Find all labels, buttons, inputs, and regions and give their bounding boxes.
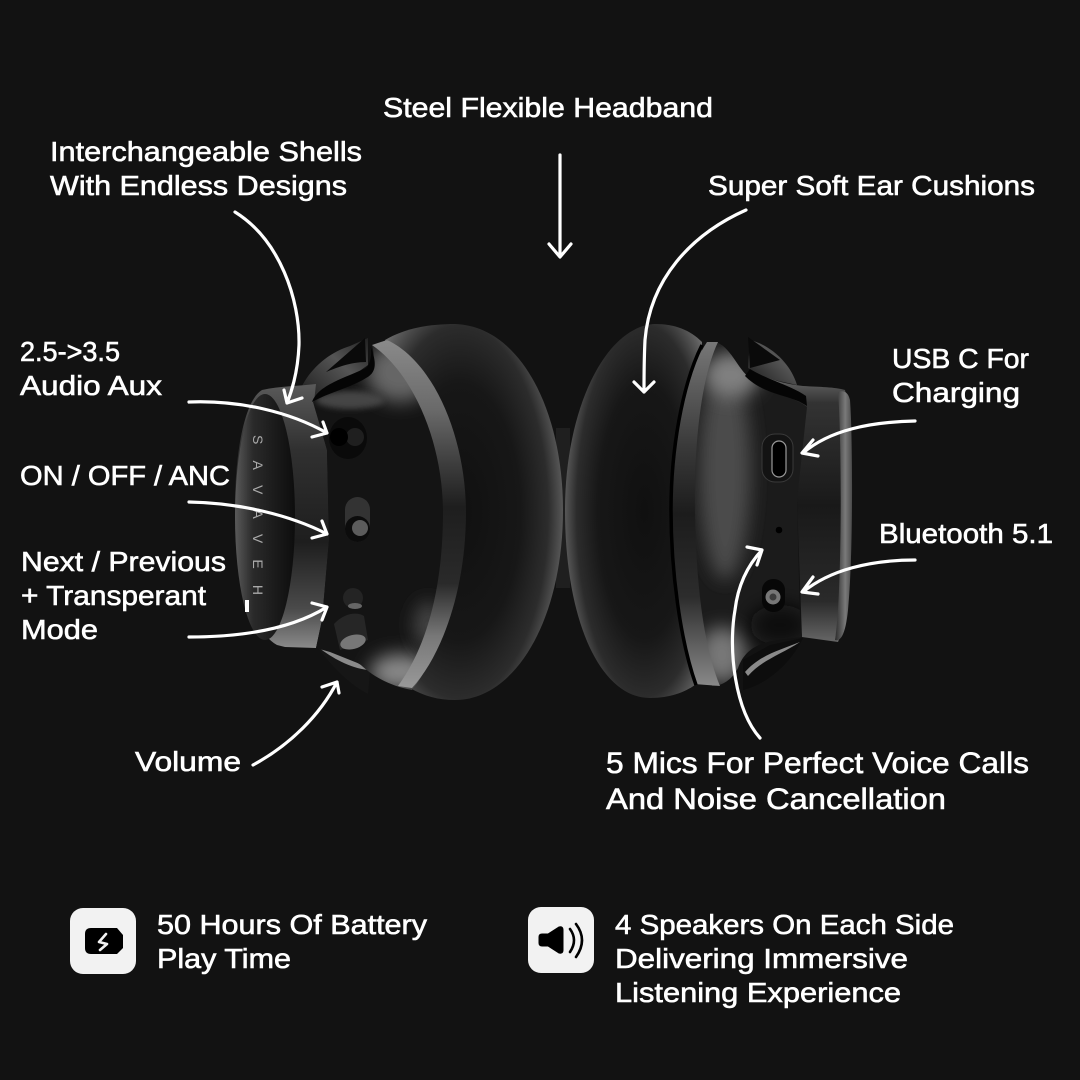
arrow: mics — [732, 547, 762, 738]
label: next previous — [21, 546, 327, 645]
left body — [313, 340, 434, 690]
arrow: bluetooth — [802, 560, 915, 594]
right shell — [750, 370, 852, 642]
audio jack — [329, 417, 367, 459]
left hinge blade top — [326, 338, 366, 372]
label: bluetooth — [802, 518, 1053, 594]
label: next previous: Next / Previous — [21, 546, 226, 577]
feature: battery — [70, 908, 427, 974]
arrow: switch — [189, 502, 327, 538]
right shell rim — [835, 391, 852, 640]
label: steel headband: Steel Flexible Headband — [383, 92, 713, 123]
label: ear cushions: Super Soft Ear Cushions — [708, 170, 1035, 201]
label: on off anc — [20, 460, 327, 538]
label: usb c — [802, 343, 1029, 456]
arrow: stick — [189, 603, 327, 637]
left hinge swoosh bottom — [318, 647, 368, 670]
headband stub — [556, 428, 570, 588]
right hinge dome — [748, 340, 797, 385]
right ear cushion — [565, 324, 702, 698]
label: volume — [135, 682, 339, 777]
label: usb c: USB C For — [892, 343, 1029, 374]
arrow: headband — [549, 155, 571, 257]
feature: battery: Play Time — [157, 943, 291, 974]
left outer face — [235, 394, 295, 640]
left hinge dome — [300, 338, 368, 402]
left hinge swoosh — [312, 345, 375, 402]
label: next previous: Mode — [21, 614, 98, 645]
label: on off anc: ON / OFF / ANC — [20, 460, 230, 491]
label: audio aux: 2.5->3.5 — [20, 336, 120, 367]
label: interchangeable shells — [50, 136, 362, 403]
feature: speakers: 4 Speakers On Each Side — [615, 909, 954, 940]
label: interchangeable shells: With Endless Designs — [50, 170, 347, 201]
label: ear cushions — [634, 170, 1035, 392]
left ear cushion — [385, 324, 563, 700]
label: interchangeable shells: Interchangeable Shells — [50, 136, 362, 167]
mic hole — [776, 527, 782, 533]
arrow: aux — [189, 402, 327, 437]
label: mics — [606, 547, 1029, 816]
left ear cup — [235, 324, 563, 700]
label: bluetooth: Bluetooth 5.1 — [879, 518, 1053, 549]
right hinge swoosh — [745, 369, 807, 406]
right ear cup — [565, 324, 852, 700]
right hinge swoosh bottom — [745, 642, 800, 676]
arrow: shells — [235, 212, 302, 403]
label: volume: Volume — [135, 746, 241, 777]
left shell ring — [235, 384, 329, 648]
label: audio aux: Audio Aux — [20, 370, 162, 401]
label: usb c: Charging — [892, 377, 1020, 408]
small white mark — [245, 600, 249, 612]
right body — [695, 343, 807, 686]
right seam — [671, 345, 702, 685]
feature: speakers: Delivering Immersive — [615, 943, 908, 974]
bluetooth button — [762, 579, 785, 612]
left highlight band — [372, 340, 466, 688]
icon: speaker — [528, 907, 594, 973]
feature: speakers: Listening Experience — [615, 977, 901, 1008]
multi-function stick — [334, 588, 368, 652]
arrow: volume — [253, 682, 339, 765]
left hinge bottom — [316, 645, 370, 694]
feature: battery: 50 Hours Of Battery — [157, 909, 427, 940]
arrow: usb — [802, 421, 915, 456]
power switch — [345, 497, 370, 542]
right hinge blade top — [748, 337, 780, 368]
right hinge bottom — [743, 638, 803, 690]
label: steel headband — [383, 92, 713, 257]
label: mics: And Noise Cancellation — [606, 783, 946, 816]
arrow: cushions — [634, 210, 746, 392]
feature: speakers — [528, 907, 954, 1008]
usb-c port — [762, 434, 793, 482]
headphones photo — [235, 324, 852, 700]
icon: battery — [70, 908, 136, 974]
label: next previous: + Transperant — [21, 580, 206, 611]
label: audio aux — [20, 336, 327, 437]
brand logo: SAVAVEH — [250, 435, 266, 595]
right highlight band — [672, 342, 720, 686]
label: mics: 5 Mics For Perfect Voice Calls — [606, 747, 1029, 780]
